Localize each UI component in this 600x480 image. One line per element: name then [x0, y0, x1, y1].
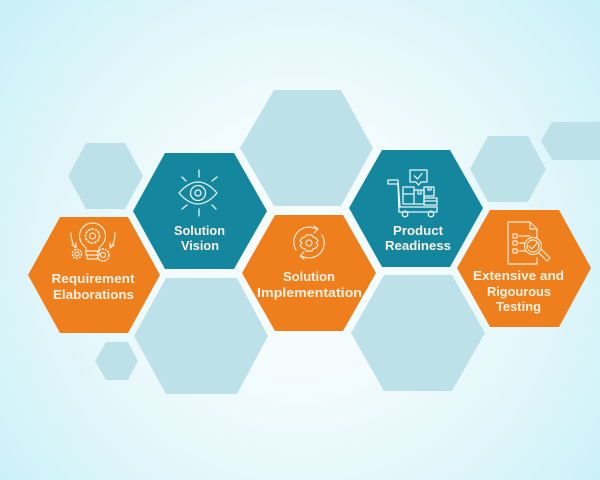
- panel: Extensive and Rigourous Testing: Testing: [496, 299, 541, 314]
- panel: Solution Implementation: Implementation: [257, 285, 362, 300]
- label: Product: [393, 223, 444, 238]
- icon: eye: [179, 170, 217, 216]
- panel: Requirement Elaborations: Elaborations: [53, 287, 134, 302]
- panel: Requirement Elaborations: [28, 217, 160, 333]
- label: Solution: [283, 269, 335, 284]
- icon: cart with boxes: [388, 170, 437, 217]
- label: Extensive and: [473, 268, 564, 283]
- panel: Solution Vision: [133, 153, 267, 269]
- icon: document with magnifier: [508, 222, 550, 264]
- icon: light bulb with gears: [71, 223, 115, 261]
- pale hexagons: [68, 90, 600, 394]
- panel: Solution Implementation: [242, 215, 376, 331]
- panel: Product Readiness: [349, 150, 483, 267]
- panel: Product Readiness: Readiness: [385, 238, 451, 253]
- panel: Extensive and Rigourous Testing: [457, 210, 591, 327]
- label: Solution: [174, 223, 225, 238]
- icon: gear cycle: [294, 226, 324, 259]
- label: Requirement: [52, 271, 135, 286]
- panel: Extensive and Rigourous Testing: Rigourous: [487, 284, 551, 299]
- panel: Solution Vision: Vision: [181, 238, 219, 253]
